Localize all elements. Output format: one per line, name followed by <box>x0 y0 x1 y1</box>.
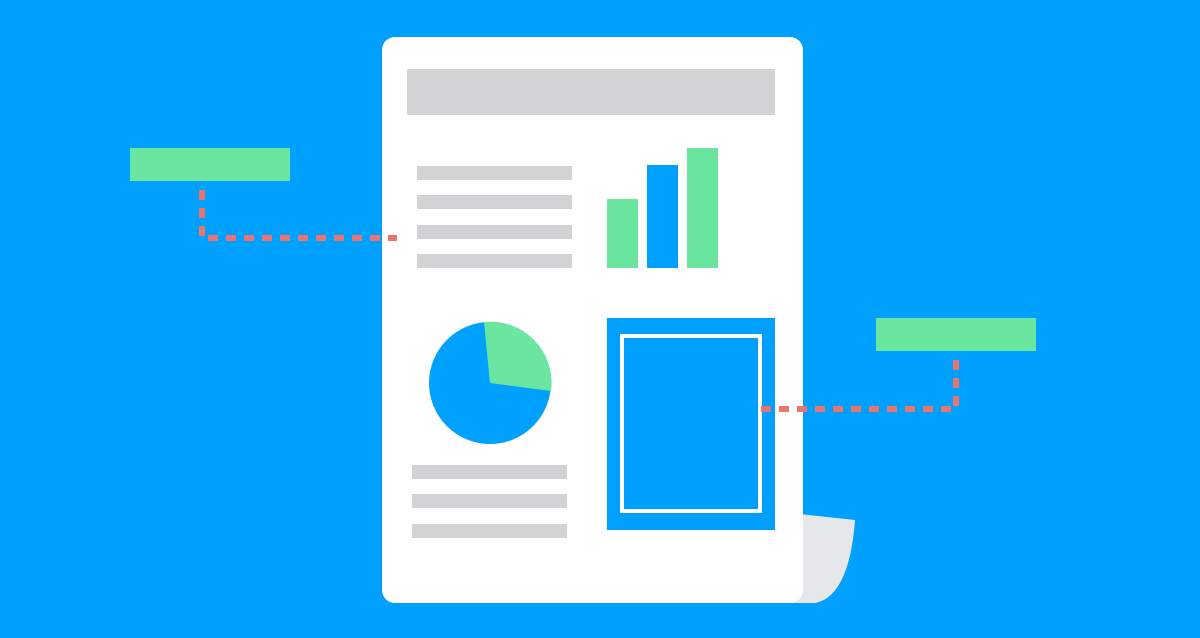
page curl <box>790 513 855 603</box>
text lines top <box>417 166 572 268</box>
title bar <box>407 69 775 115</box>
document page <box>382 37 803 603</box>
callout right <box>760 318 1036 409</box>
pie chart <box>429 322 552 444</box>
text lines bottom <box>412 465 567 538</box>
callout left <box>130 148 397 238</box>
bar chart <box>607 148 718 268</box>
image frame <box>607 318 775 530</box>
